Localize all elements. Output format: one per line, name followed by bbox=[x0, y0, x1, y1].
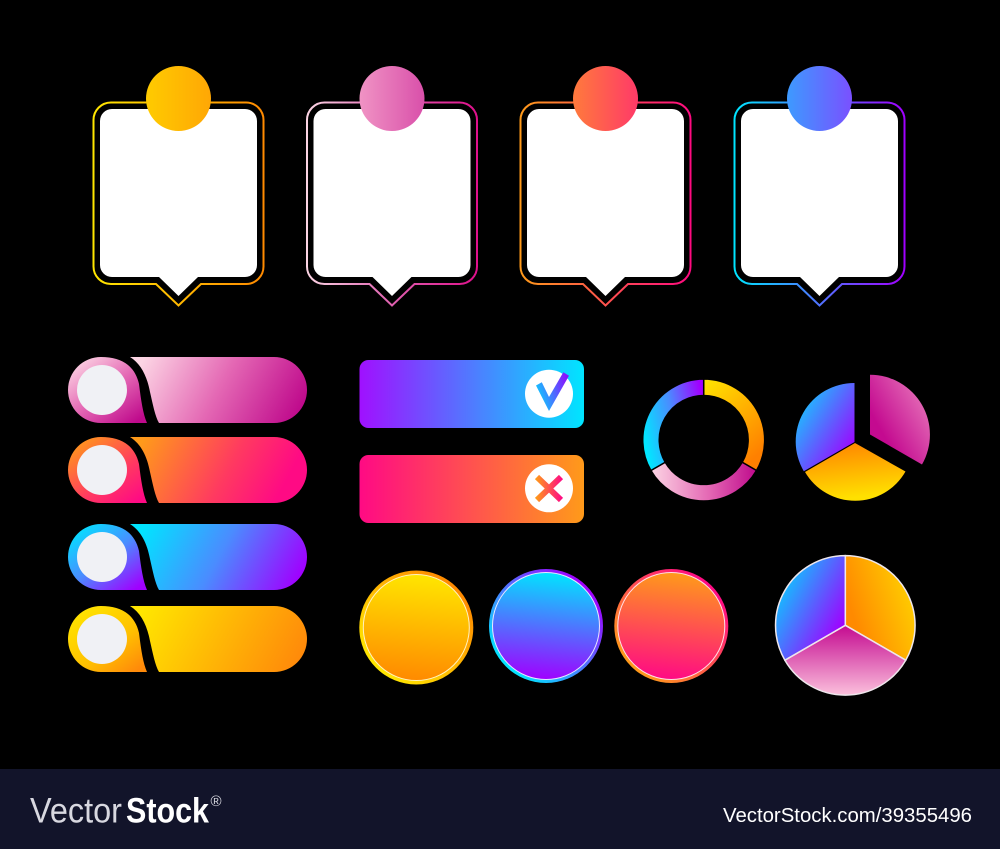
gradient circle: blue bbox=[489, 569, 603, 683]
footer url: VectorStock.com/39355496 bbox=[723, 805, 972, 827]
footer logo bbox=[30, 791, 222, 831]
toggle bar 1: pink bbox=[68, 357, 307, 423]
donut chart bbox=[643, 379, 765, 501]
toggle bar 4: yellow bbox=[68, 606, 307, 672]
callout card 2: pink bbox=[307, 66, 477, 306]
footer logo: ® bbox=[210, 793, 222, 810]
check button bbox=[360, 360, 584, 428]
gradient circle: yellow bbox=[359, 570, 473, 684]
toggle bar 3: blue bbox=[68, 524, 307, 590]
footer logo: Stock bbox=[126, 791, 209, 831]
outlined pie chart bbox=[776, 556, 915, 695]
cross button bbox=[360, 455, 584, 523]
gradient circle: coral bbox=[614, 569, 728, 683]
exploded pie chart bbox=[796, 375, 930, 501]
callout card 1: yellow bbox=[94, 66, 264, 306]
footer bar bbox=[0, 769, 1000, 849]
callout card 3: coral bbox=[520, 66, 690, 306]
footer logo: Vector bbox=[30, 791, 122, 831]
toggle bar 2: orange bbox=[68, 437, 307, 503]
callout card 4: blue bbox=[734, 66, 904, 306]
